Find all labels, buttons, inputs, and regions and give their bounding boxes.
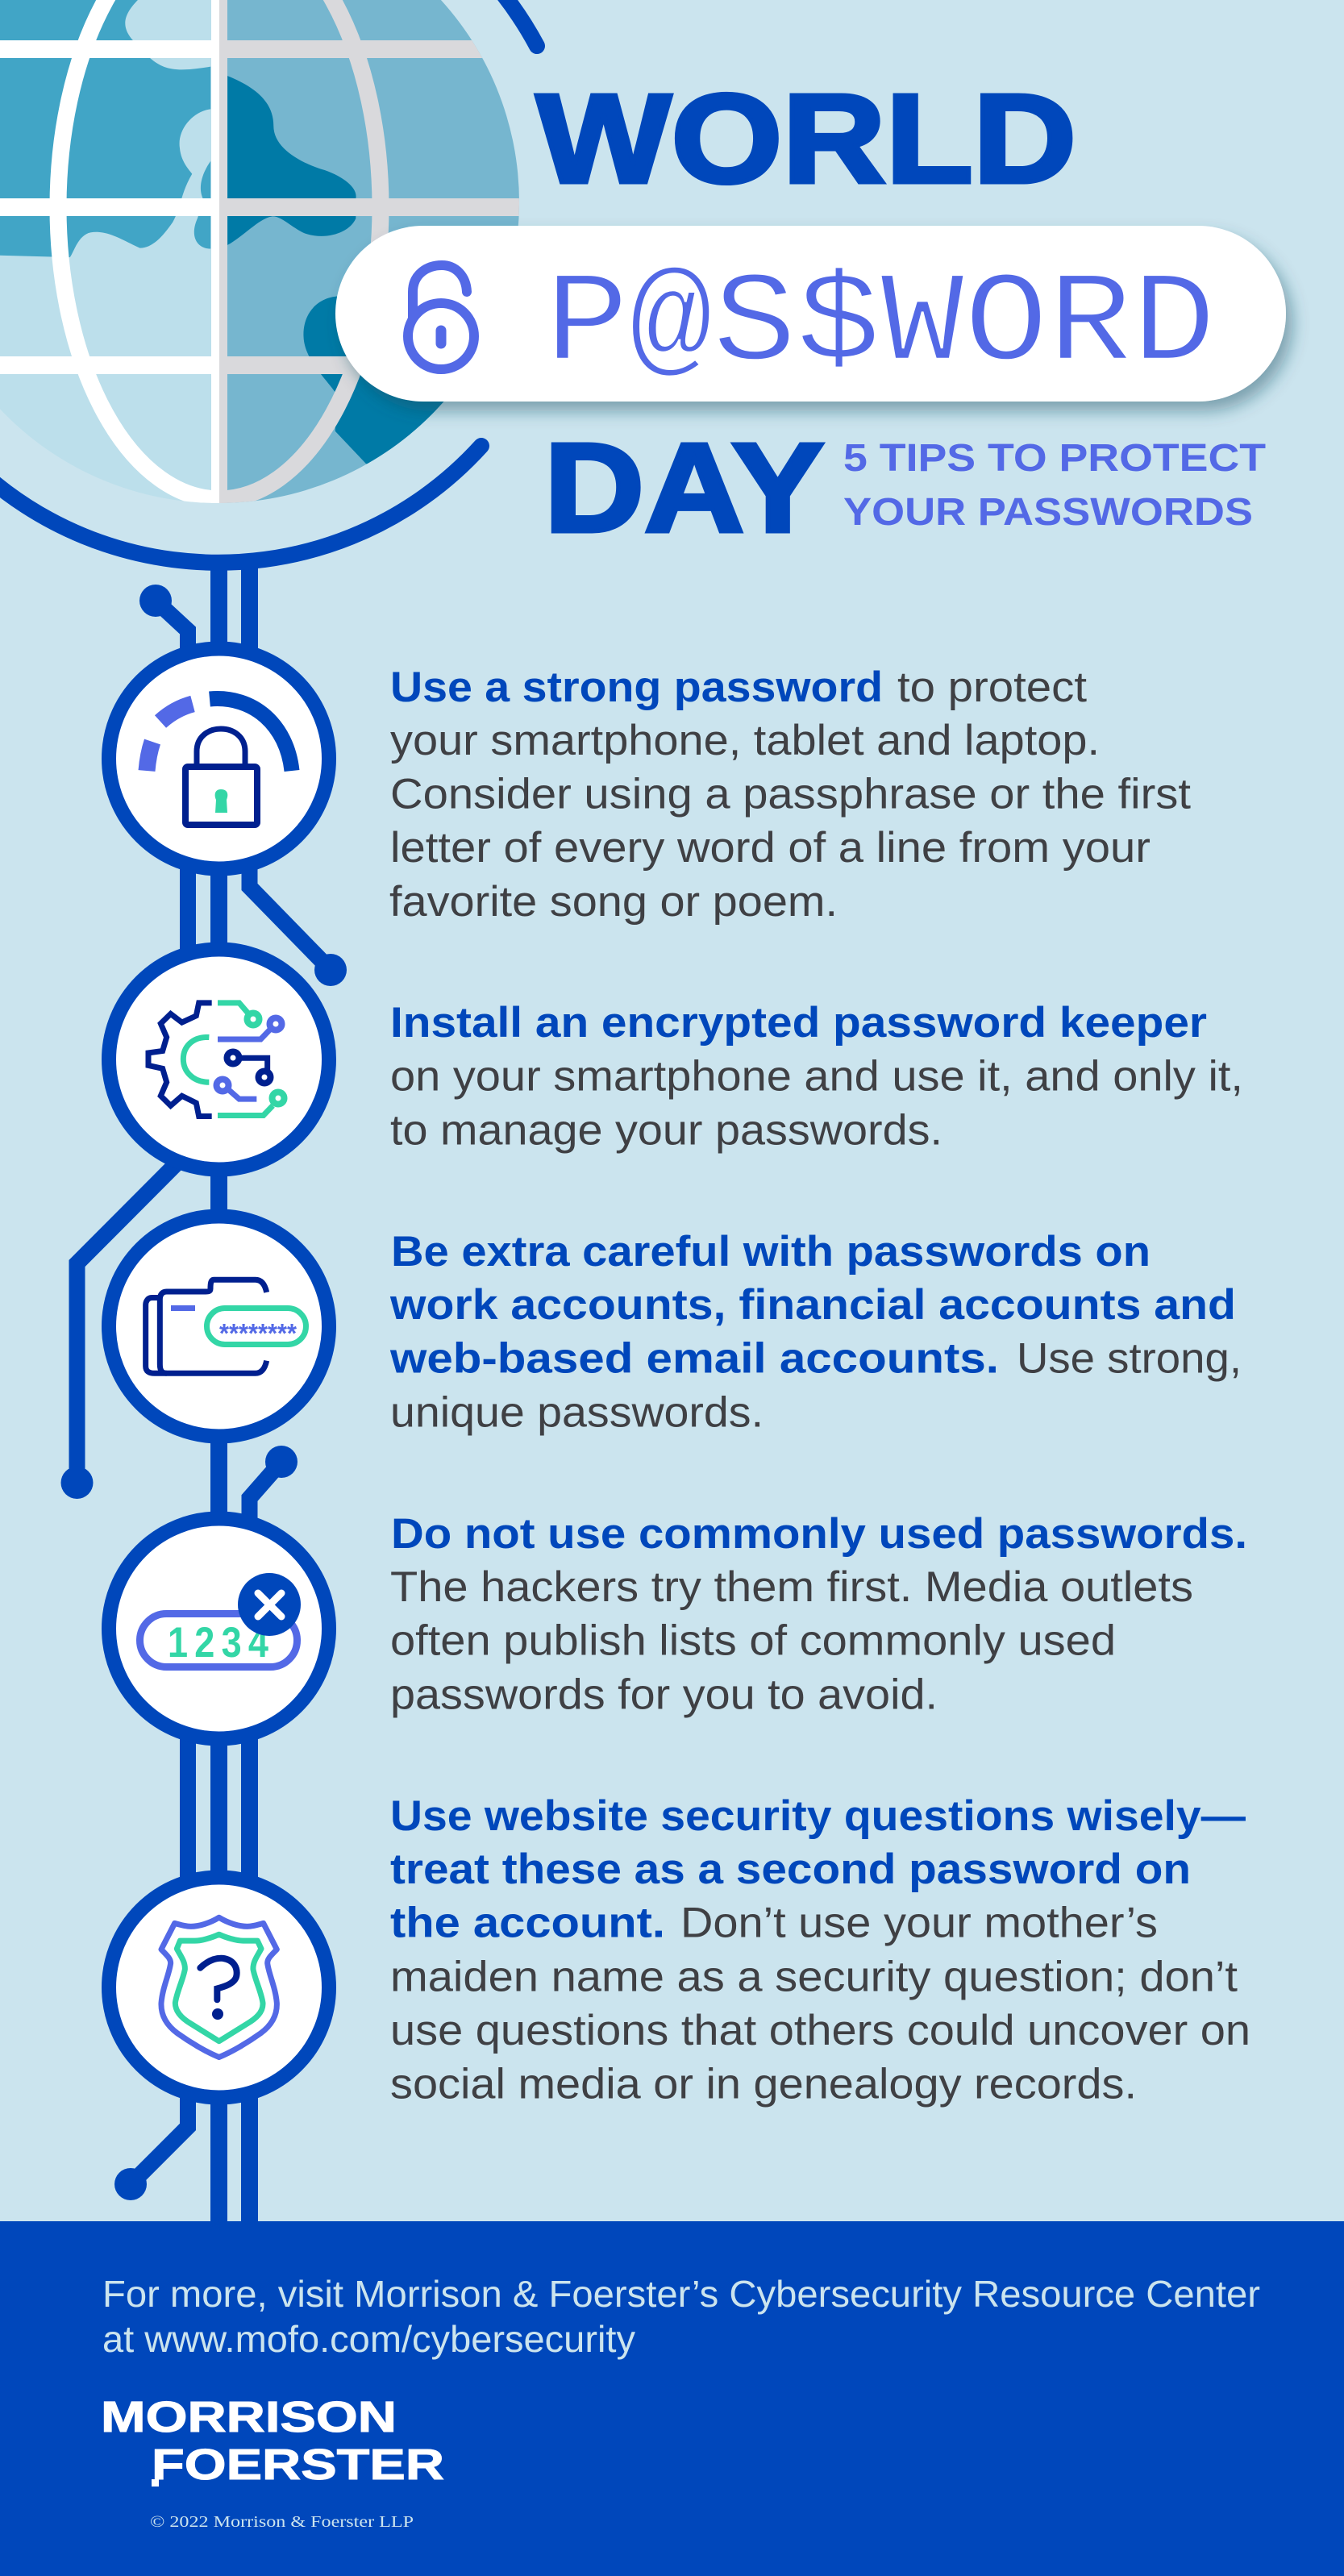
footer panel	[0, 2221, 1344, 2576]
text block: tip 2: on your smartphone and use it, and only it,	[390, 1053, 1243, 1101]
text block: tip 4	[390, 1510, 1247, 1718]
text block: tip 1	[389, 664, 1191, 926]
panel: tip 5 icon, shield with question mark	[109, 1877, 329, 2098]
footer call to action: at www.mofo.com/cybersecurity	[102, 2318, 635, 2360]
text block: tip 3: web-based email accounts.	[389, 1335, 999, 1383]
icon: open padlock shaped like a 6	[408, 265, 474, 369]
footer call to action: For more, visit Morrison & Foerster’s Cybersecurity Resource Center	[102, 2273, 1260, 2315]
subtitle	[843, 437, 1266, 534]
text block: tip 5: maiden name as a security question; don’t	[390, 1953, 1238, 2000]
subtitle: 5 TIPS TO PROTECT	[843, 437, 1266, 480]
title pill: password	[335, 226, 1286, 402]
text block: tip 5	[390, 1792, 1250, 2108]
text block: tip 3: Be extra careful with passwords on	[391, 1228, 1151, 1276]
panel: tip 1 icon, padlock	[109, 648, 329, 869]
text block: tip 5: social media or in genealogy records.	[390, 2061, 1137, 2108]
text block: tip 1: your smartphone, tablet and laptop.	[390, 717, 1100, 764]
text block: tip 3: unique passwords.	[390, 1388, 764, 1436]
subtitle: YOUR PASSWORDS	[843, 491, 1253, 534]
text block: tip 5: Use website security questions wisely—	[390, 1792, 1246, 1840]
text block: tip 1: to protect	[897, 664, 1087, 711]
text block: tip 3	[389, 1228, 1242, 1436]
logo: Morrison Foerster	[101, 2393, 444, 2489]
panel: tip 4 icon, rejected 1234 password: 1234	[168, 1619, 269, 1667]
panel: tip 3 icon, folder with masked password: ********	[219, 1318, 297, 1348]
text block: tip 2: to manage your passwords.	[390, 1106, 942, 1154]
title word: P@S$WORD: P@S$WORD	[545, 253, 1216, 397]
text block: tip 2: Install an encrypted password keeper	[390, 999, 1207, 1047]
copyright: © 2022 Morrison & Foerster LLP	[150, 2513, 414, 2531]
logo: Morrison Foerster: FOERSTER	[152, 2441, 444, 2489]
text block: tip 5: treat these as a second password on	[390, 1846, 1191, 1893]
panel: tip 4 icon, rejected 1234 password	[109, 1519, 329, 1738]
panel: tip 3 icon, folder with masked password	[109, 1216, 329, 1437]
text block: tip 1: letter of every word of a line from your	[390, 824, 1151, 872]
text block: tip 4: often publish lists of commonly used	[390, 1617, 1116, 1665]
text block: tip 5: the account.	[390, 1900, 665, 1947]
text block: tip 5: use questions that others could uncover on	[390, 2007, 1250, 2054]
text block: tip 1: Consider using a passphrase or the first	[390, 771, 1191, 818]
title: DAY: DAY	[544, 418, 824, 559]
text block: tip 1: Use a strong password	[390, 664, 883, 711]
text block: tip 4: Do not use commonly used passwords.	[391, 1510, 1247, 1558]
footer call to action	[102, 2273, 1260, 2360]
circuit connector lines	[61, 560, 347, 2225]
text block: tip 3: Use strong,	[1017, 1335, 1242, 1383]
panel: tip 2 icon, gear and circuit	[109, 950, 329, 1169]
text block: tip 1: favorite song or poem.	[389, 878, 838, 926]
logo: Morrison Foerster: MORRISON	[101, 2393, 397, 2441]
text block: tip 2	[390, 999, 1243, 1154]
text block: tip 3: work accounts, financial accounts and	[389, 1281, 1236, 1329]
globe orbit ring	[0, 0, 537, 563]
text block: tip 4: The hackers try them first. Media outlets	[390, 1563, 1193, 1611]
title: WORLD: WORLD	[536, 69, 1076, 210]
text block: tip 4: passwords for you to avoid.	[390, 1671, 938, 1718]
text block: tip 5: Don’t use your mother’s	[680, 1900, 1158, 1947]
globe illustration	[0, 0, 526, 508]
